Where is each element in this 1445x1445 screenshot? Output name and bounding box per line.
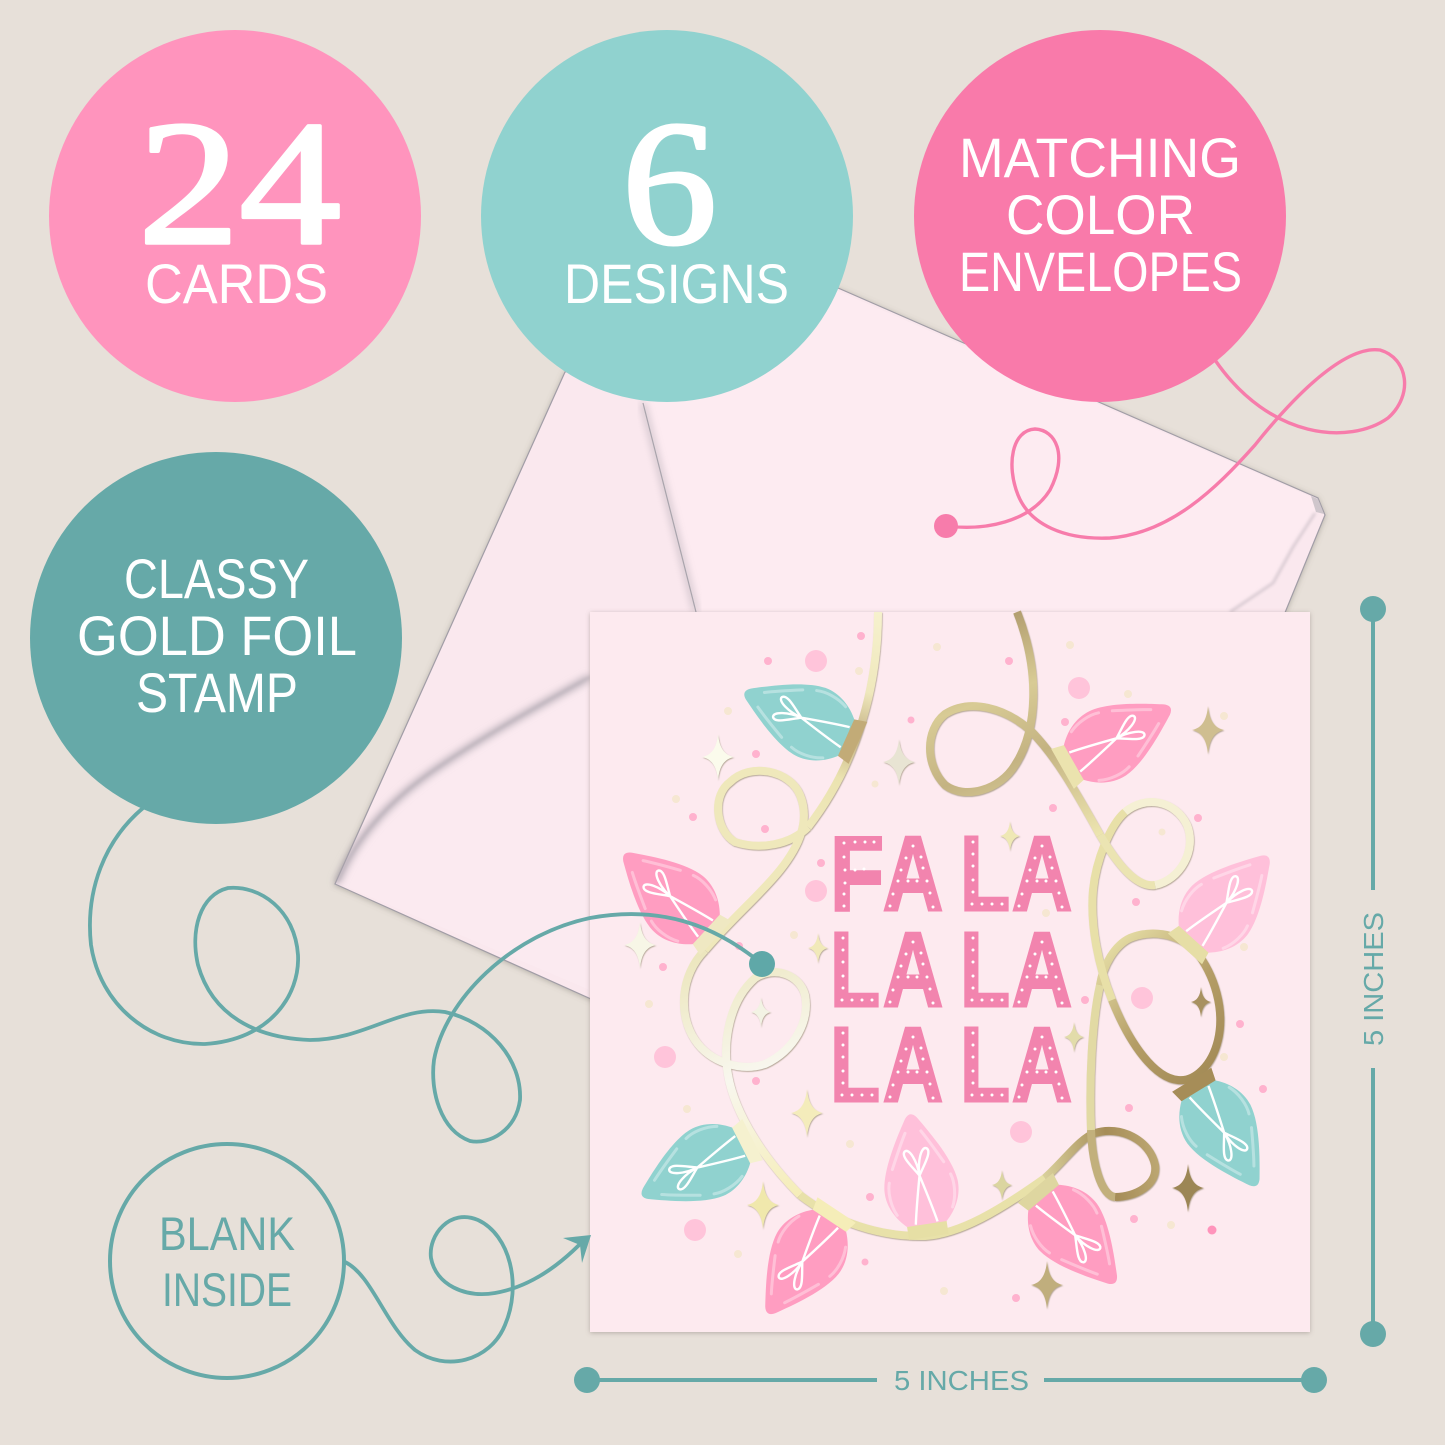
callout circle: matching color envelopes: COLOR <box>1006 183 1195 246</box>
callout circle: matching color envelopes <box>914 30 1286 402</box>
bulb: pink lower right <box>1007 1164 1143 1307</box>
envelope <box>335 288 1325 1048</box>
card message: fa la la la la la: L <box>960 911 1010 1029</box>
card message: fa la la la la la <box>830 815 1072 1124</box>
callout circle: 6 designs: 6 <box>622 84 717 282</box>
pink squiggle with dot <box>934 350 1405 538</box>
callout circle: matching color envelopes: MATCHING <box>959 126 1241 189</box>
greeting card <box>590 612 1310 1334</box>
outlined circle: blank inside <box>110 1144 344 1378</box>
callout circle: matching color envelopes: ENVELOPES <box>959 240 1242 303</box>
callout circle: classy gold foil stamp: GOLD FOIL <box>77 604 357 667</box>
card message: fa la la la la la: A <box>883 815 943 933</box>
dimension: horizontal 5 inches: 5 INCHES <box>894 1365 1029 1396</box>
bulb: pink left <box>599 827 741 965</box>
card message: fa la la la la la: A <box>883 911 943 1029</box>
card message: fa la la la la la: F <box>830 815 884 933</box>
dimension: vertical 5 inches <box>1358 596 1389 1347</box>
gold foil sparkles <box>624 706 1224 1309</box>
callout circle: classy gold foil stamp: STAMP <box>136 661 298 724</box>
card message: fa la la la la la: A <box>883 1006 943 1124</box>
card message: fa la la la la la: L <box>960 815 1010 933</box>
callout circle: 24 cards: CARDS <box>145 252 328 315</box>
card message: fa la la la la la: L <box>960 1006 1010 1124</box>
callout circle: 24 cards <box>49 30 421 402</box>
card message: fa la la la la la: L <box>830 911 880 1029</box>
confetti dots <box>645 632 1267 1302</box>
dimension: vertical 5 inches: 5 INCHES <box>1358 912 1389 1046</box>
bulb: light pink bottom <box>874 1109 965 1242</box>
bulb: teal right <box>1160 1060 1288 1205</box>
bulb: teal lower left <box>625 1106 769 1229</box>
teal squiggle with dot <box>90 808 775 1142</box>
callout circle: 24 cards: 24 <box>138 84 341 282</box>
card panel <box>590 612 1310 1332</box>
outlined circle: blank inside: BLANK <box>159 1207 295 1260</box>
dimension: horizontal 5 inches <box>574 1365 1327 1396</box>
card message: fa la la la la la: A <box>1012 815 1072 933</box>
callout circle: 6 designs: DESIGNS <box>564 252 789 315</box>
card message: fa la la la la la: A <box>1012 911 1072 1029</box>
card message: fa la la la la la: L <box>830 1006 880 1124</box>
callout circle: 6 designs <box>481 30 853 402</box>
bulb: pink bottom left <box>737 1189 868 1334</box>
callout circle: classy gold foil stamp <box>30 452 402 824</box>
callout circle: classy gold foil stamp: CLASSY <box>124 547 309 610</box>
bulb: light pink right <box>1157 832 1296 974</box>
arrow to card <box>345 1217 591 1362</box>
bulb: teal top left <box>730 659 873 777</box>
card message: fa la la la la la: A <box>1012 1006 1072 1124</box>
outlined circle: blank inside: INSIDE <box>162 1263 292 1316</box>
light strand wire <box>684 612 1220 1236</box>
bulb: pink top <box>1044 675 1189 801</box>
